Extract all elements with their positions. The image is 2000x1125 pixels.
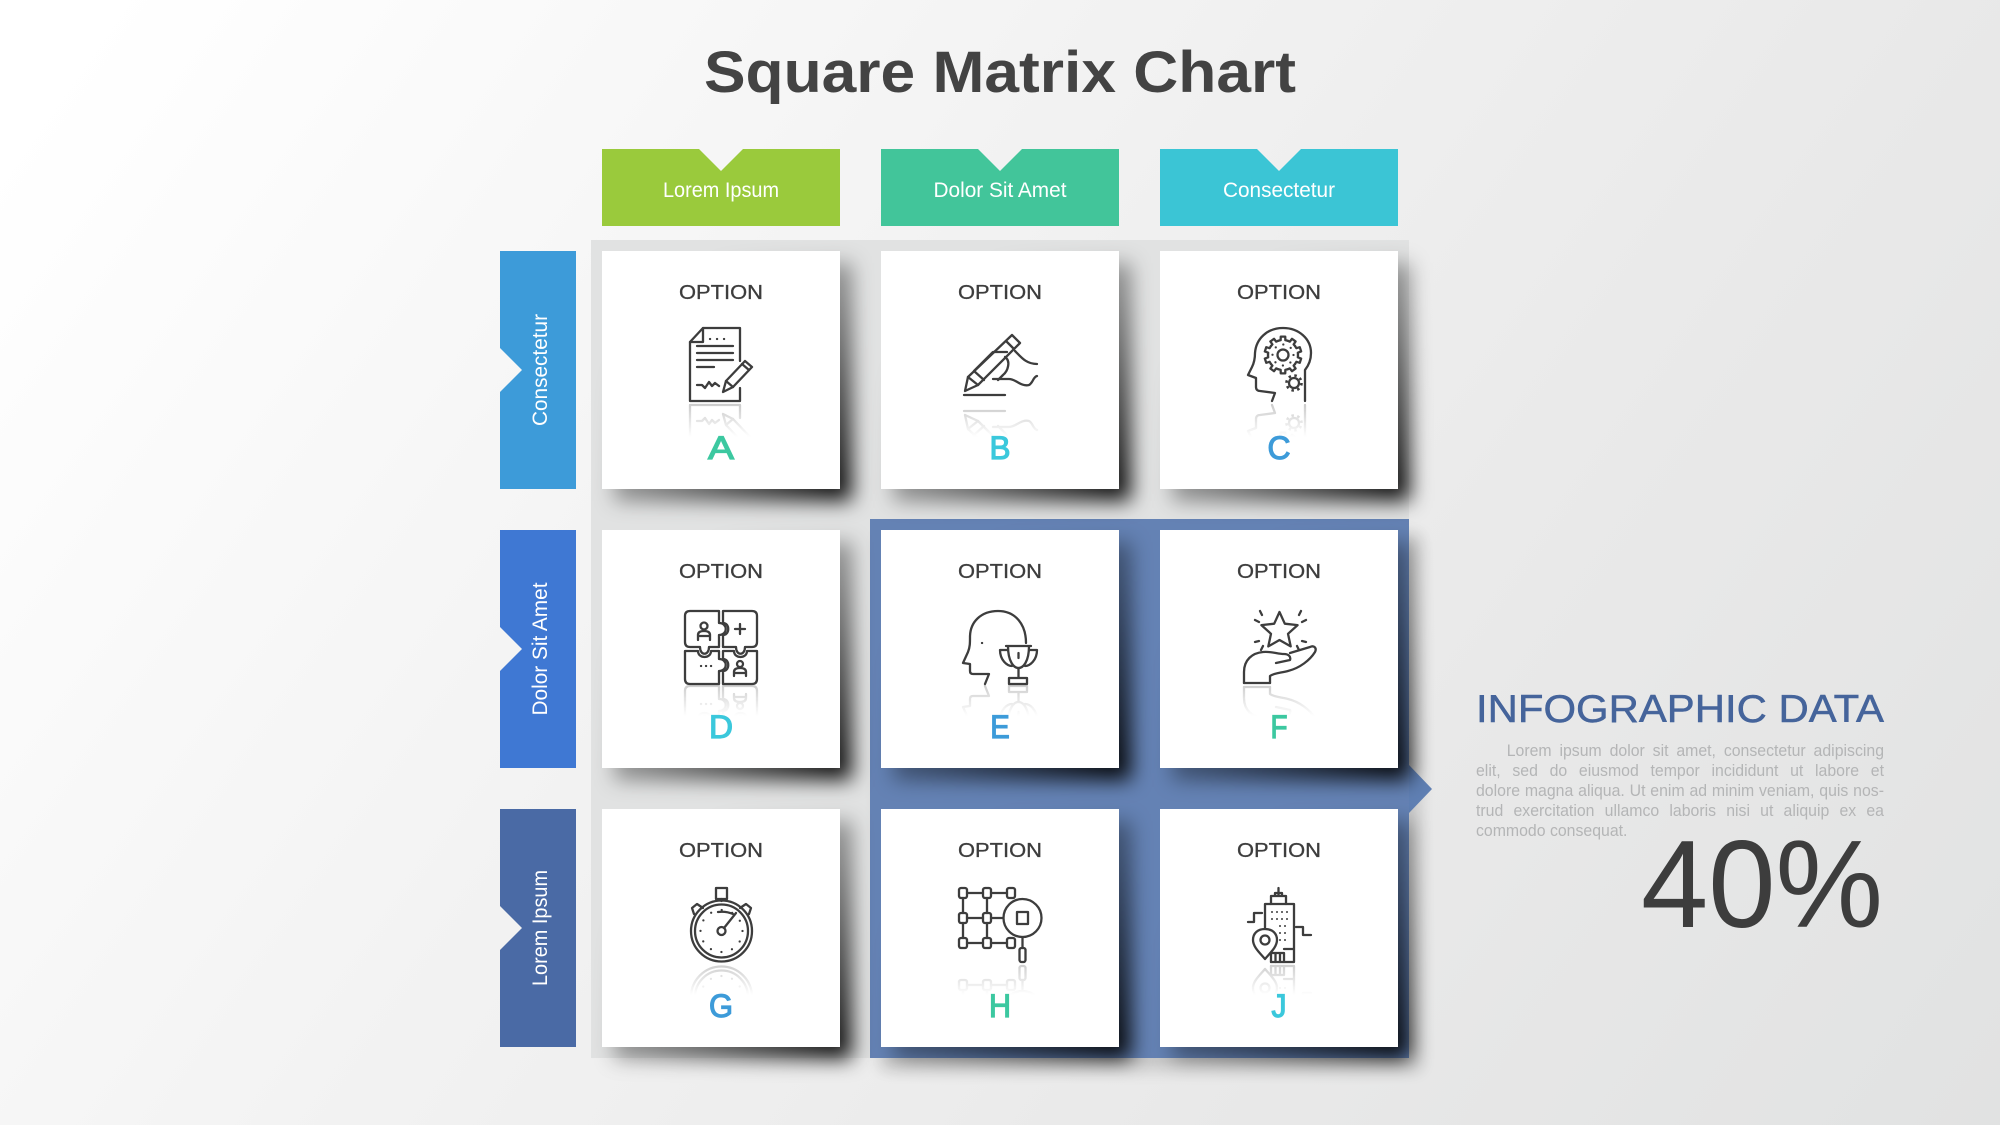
column header: Dolor Sit Amet xyxy=(881,149,1119,226)
icon: star in hand xyxy=(1244,611,1316,683)
icon reflection xyxy=(963,410,1038,432)
letter: D xyxy=(709,709,733,745)
paragraph text: Lorem ipsum dolor sit amet, consectetur adipiscing xyxy=(1507,742,1884,760)
option label: OPTION xyxy=(958,561,1042,583)
option label: OPTION xyxy=(1237,561,1321,583)
icon: head with trophy xyxy=(963,611,1037,684)
icon: grid with magnifier xyxy=(959,888,1042,962)
icon reflection xyxy=(962,685,1036,710)
icon: puzzle xyxy=(685,611,757,684)
card H xyxy=(881,809,1131,1059)
big percentage: 40% xyxy=(1641,816,1883,954)
column header: Consectetur: Consectetur xyxy=(1223,179,1335,202)
row header: Lorem Ipsum xyxy=(500,809,576,1047)
title: Square Matrix Chart xyxy=(704,40,1296,105)
letter: E xyxy=(990,709,1010,745)
paragraph text: dolore magna aliqua. Ut enim ad minim veniam, quis nos- xyxy=(1476,782,1884,800)
column header: Consectetur xyxy=(1160,149,1398,226)
card F xyxy=(1160,530,1410,780)
letter: G xyxy=(709,988,733,1024)
icon: building with location pin xyxy=(1248,888,1311,962)
icon reflection xyxy=(1252,964,1296,990)
option label: OPTION xyxy=(958,840,1042,862)
row header: Lorem Ipsum: Lorem Ipsum xyxy=(529,870,552,986)
letter: C xyxy=(1268,430,1290,466)
column header: Dolor Sit Amet: Dolor Sit Amet xyxy=(934,179,1067,202)
row header: Consectetur xyxy=(500,251,576,489)
card A xyxy=(602,251,852,501)
letter: F xyxy=(1270,709,1288,745)
letter: H xyxy=(989,988,1011,1024)
row header: Consectetur: Consectetur xyxy=(529,314,552,426)
letter: B xyxy=(990,430,1010,466)
card C xyxy=(1160,251,1410,501)
icon reflection xyxy=(1247,404,1306,432)
option label: OPTION xyxy=(679,561,763,583)
card E xyxy=(881,530,1131,780)
paragraph text xyxy=(1476,742,1884,840)
panel: grey matrix backing xyxy=(591,240,1409,1058)
icon reflection xyxy=(691,965,752,990)
card G xyxy=(602,809,852,1059)
icon reflection xyxy=(688,404,746,432)
option label: OPTION xyxy=(1237,840,1321,862)
option label: OPTION xyxy=(958,282,1042,304)
side heading: INFOGRAPHIC DATA xyxy=(1476,688,1884,731)
icon reflection xyxy=(684,685,758,710)
card J xyxy=(1160,809,1410,1059)
card D xyxy=(602,530,852,780)
card B xyxy=(881,251,1131,501)
option label: OPTION xyxy=(1237,282,1321,304)
row header: Dolor Sit Amet xyxy=(500,530,576,768)
column header: Lorem Ipsum: Lorem Ipsum xyxy=(663,179,779,202)
letter: A xyxy=(708,430,735,466)
paragraph text: trud exercitation ullamco laboris nisi ut aliquip ex ea xyxy=(1476,802,1884,820)
paragraph text: elit, sed do eiusmod tempor incididunt ut labore et xyxy=(1476,762,1884,780)
icon reflection xyxy=(958,964,1027,990)
letter: J xyxy=(1272,988,1286,1024)
option label: OPTION xyxy=(679,282,763,304)
icon: hand writing xyxy=(964,335,1037,395)
paragraph text: commodo consequat. xyxy=(1476,822,1627,840)
icon reflection xyxy=(1242,686,1310,710)
column header: Lorem Ipsum xyxy=(602,149,840,226)
row header: Dolor Sit Amet: Dolor Sit Amet xyxy=(529,582,552,716)
icon: head with gears xyxy=(1248,328,1311,401)
option label: OPTION xyxy=(679,840,763,862)
icon: signed document xyxy=(690,328,752,401)
panel: highlighted blue quadrant with arrow xyxy=(870,519,1432,1070)
icon: stopwatch xyxy=(691,888,752,962)
